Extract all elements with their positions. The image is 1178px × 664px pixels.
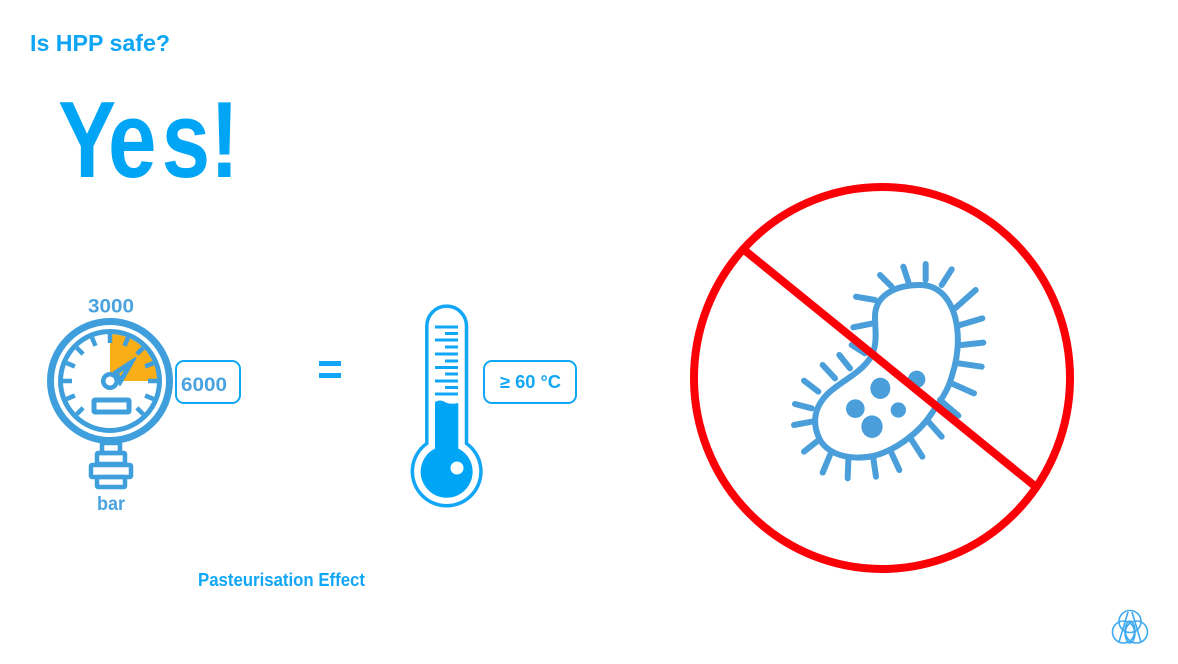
logo	[1112, 610, 1148, 643]
caption: Pasteurisation Effect: Pasteurisation Effect	[198, 570, 365, 590]
heading: Is HPP safe?: Is HPP safe?	[30, 30, 170, 56]
gauge rings	[50, 322, 170, 440]
gauge label: 3000: 3000	[88, 296, 134, 318]
gauge ticks	[63, 334, 157, 414]
gauge display window	[94, 400, 129, 412]
thermometer bulb highlight	[450, 462, 464, 474]
icon: bacterium	[794, 264, 983, 478]
icon: pressure gauge	[50, 296, 170, 515]
thermometer mercury	[421, 400, 473, 498]
thermometer scale ticks	[435, 327, 458, 394]
bacterium spots	[846, 371, 925, 438]
callout: temperature	[484, 361, 576, 403]
callout: 6000: 6000	[181, 375, 227, 396]
thermometer outline	[412, 306, 481, 506]
gauge label: bar: bar	[97, 494, 126, 515]
bacterium body	[815, 285, 958, 458]
bacterium flagella	[794, 264, 983, 478]
icon: thermometer	[412, 306, 481, 506]
callout: temperature: ≥ 60 °C	[500, 372, 561, 392]
gauge orange sector	[110, 334, 157, 381]
gauge stem fitting	[91, 443, 131, 487]
title: Yes!: Yes!	[58, 79, 239, 200]
prohibition sign	[694, 187, 1070, 569]
equals sign	[319, 361, 341, 378]
callout: 6000	[176, 361, 240, 403]
gauge needle	[101, 358, 136, 390]
